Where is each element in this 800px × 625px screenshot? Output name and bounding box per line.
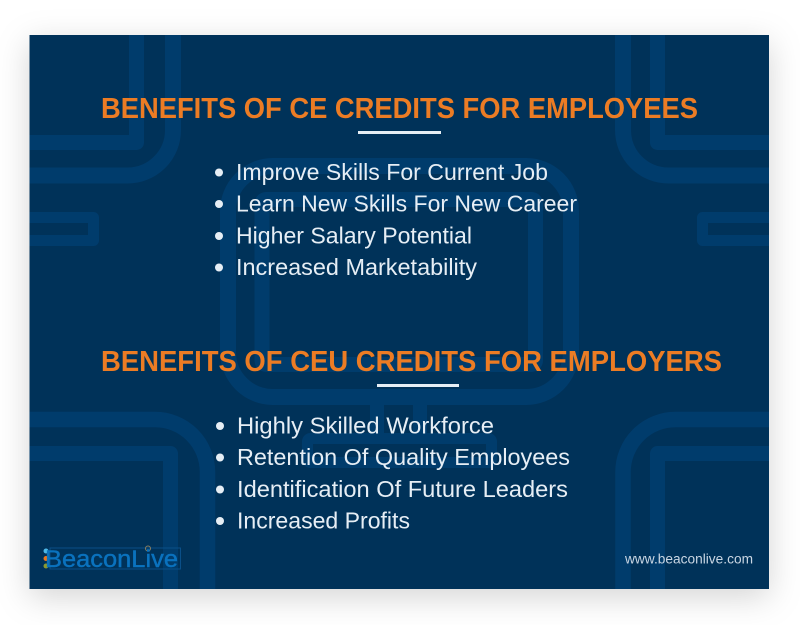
bullet list: employer benefits	[216, 412, 570, 534]
bullet list: employee benefits: Increased Marketability	[236, 254, 478, 280]
bullet list: employer benefits: Retention Of Quality Employees	[237, 444, 570, 470]
heading: CE credits for employees: BENEFITS OF CE CREDITS FOR EMPLOYEES	[101, 93, 698, 125]
bullet list: employee benefits: Improve Skills For Current Job	[236, 159, 548, 185]
bullet list: employer benefits: Identification Of Future Leaders	[237, 476, 568, 502]
bullet list: employee benefits	[215, 159, 577, 280]
bullet list: employer benefits: Increased Profits	[237, 508, 410, 534]
bullet list: employee benefits: Learn New Skills For New Career	[236, 191, 577, 217]
heading underline 1	[358, 131, 441, 134]
bullet list: employer benefits: Highly Skilled Workforce	[237, 412, 494, 438]
logo: BeaconLive: BeaconLive	[45, 546, 178, 573]
heading: CEU credits for employers: BENEFITS OF CEU CREDITS FOR EMPLOYERS	[101, 346, 722, 378]
heading underline 2	[377, 384, 459, 387]
bullet list: employee benefits: Higher Salary Potential	[236, 222, 472, 248]
website url: www.beaconlive.com	[624, 552, 753, 566]
